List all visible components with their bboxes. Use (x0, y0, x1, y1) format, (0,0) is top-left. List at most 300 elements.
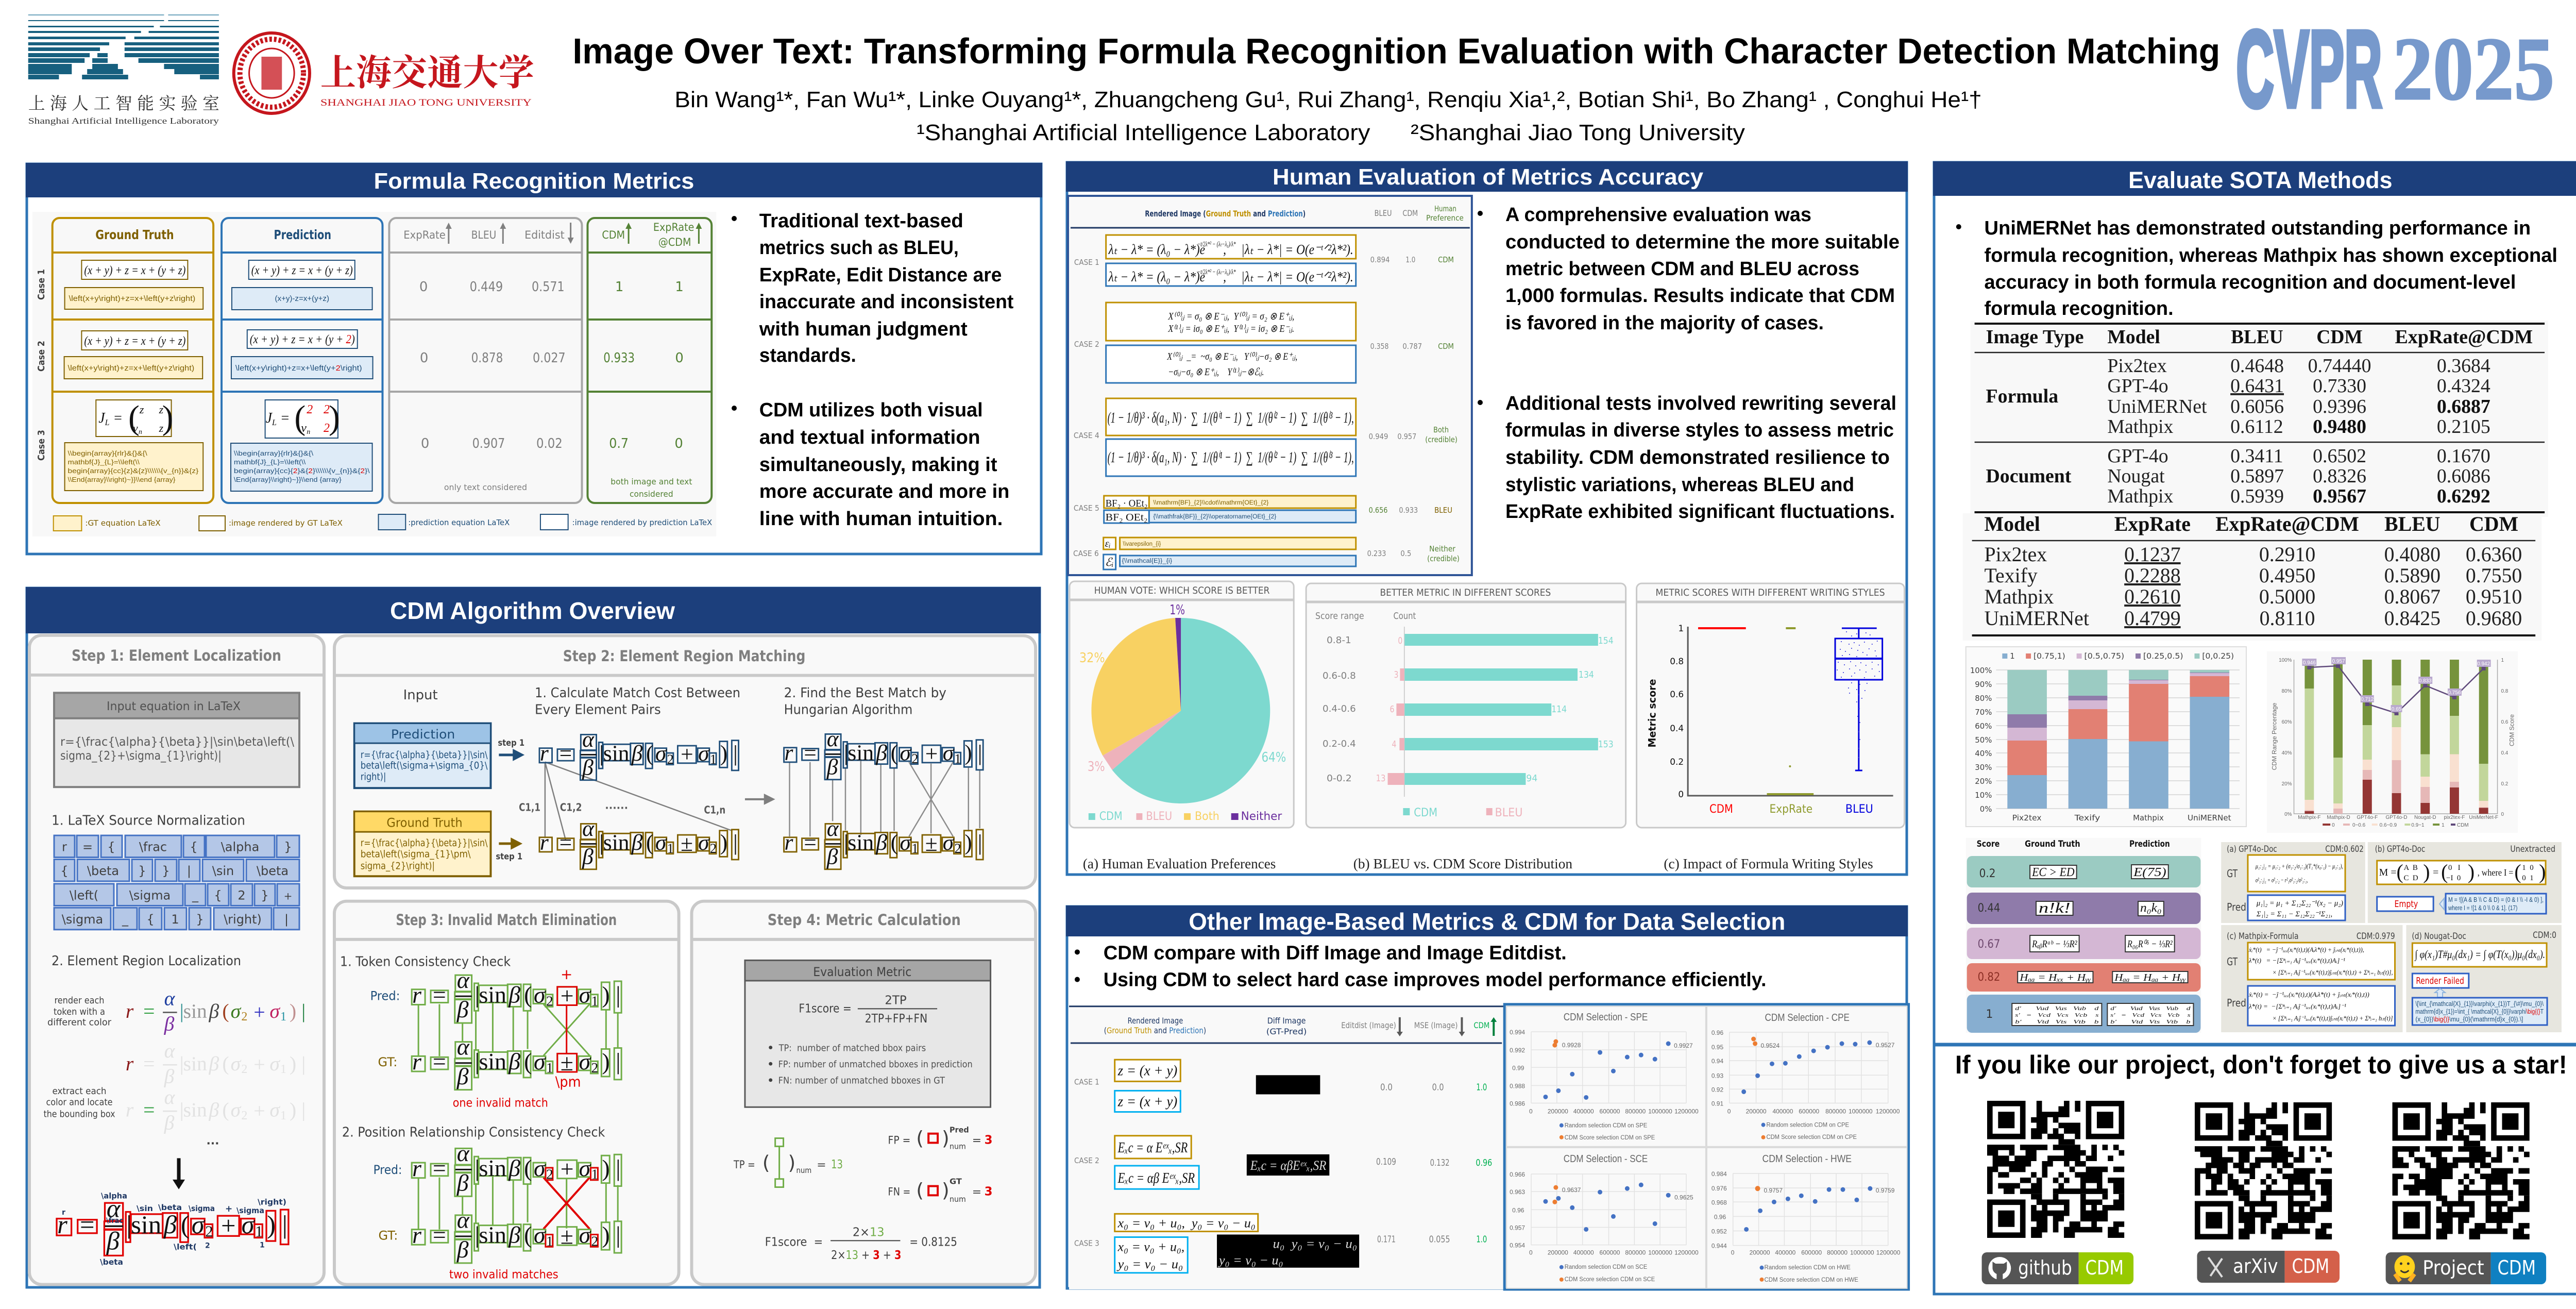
panel: Formula Recognition Metrics (26, 163, 1042, 554)
case formulas: λₜ − λ* = (λ₀ − λ*)e , |λₜ − λ*| = O(e⁻ᵗᐟ²λ*²). (1108, 269, 1353, 284)
panel content (1955, 1050, 2567, 1284)
faded formula 1: ) (290, 1052, 296, 1075)
case 2 row: Eₓc = αβEᵉˣₓ,SR (1250, 1158, 1326, 1173)
score examples table: 0.67 (1978, 938, 2000, 951)
faded formula 2: ) (290, 1099, 296, 1121)
chart: pie human vote: Both (1195, 810, 1219, 823)
position check gt formula: ± (561, 1222, 573, 1249)
case 2 row: CASE 2 (1074, 1156, 1099, 1165)
table: image type results: 0.9567 (2313, 485, 2366, 507)
case labels (36, 269, 47, 461)
metric values: both image and text (611, 477, 692, 486)
formula cells: (x + y) + z = x + (y + z) (84, 334, 185, 348)
ground truth formula boxes: r (540, 830, 549, 855)
example (c) Mathpix-Formula: ẋᵢ*(t) = −ĵ⁻¹ᵢₑₓ(xᵢ*(t),t)(Aᵢλ̇*(t) + ĵᵢₙₜ(xᵢ*(t),t)), (2248, 946, 2364, 953)
table: image type results: 0.6887 (2437, 396, 2490, 417)
metric values: 0 (421, 436, 429, 451)
faded formula 2: α (164, 1086, 176, 1109)
ground truth input (354, 812, 490, 876)
chart: CDM Selection SCE: 800000 (1625, 1249, 1646, 1256)
score examples table: d′ Vud Vus Vub d (2110, 1005, 2191, 1012)
prediction formula boxes: r (540, 741, 549, 766)
input equation box: sigma_{2}+\sigma_{1}\right)| (60, 749, 222, 763)
step 3: Invalid Match Elimination: Step 3: Invalid Match Elimination (396, 911, 617, 929)
table: image type results: 0.6292 (2437, 485, 2490, 507)
panel content (32, 169, 1014, 536)
chart: better metric bars: 134 (1579, 669, 1594, 680)
chart: stacked score ranges: 50% (1975, 735, 1992, 745)
LaTeX normalization tokens: \beta (257, 864, 289, 878)
element region localization: color and locate (46, 1097, 112, 1108)
formula with red boxes and labels: ( (181, 1210, 190, 1239)
example (a) GPT4o-Doc: Σ₁|₂ = Σ₁₁ − Σ₁₂Σ₂₂⁻¹Σ₂₁, (2256, 910, 2332, 918)
chart: stacked score ranges: 0% (1980, 804, 1992, 814)
formula cells: \\begin{array}{rlr}&{}&{\ (68, 449, 147, 457)
best match prediction formula: σ (943, 741, 955, 765)
table: model results: UniMERNet (1985, 607, 2089, 630)
table: model results: 0.2610 (2124, 585, 2181, 608)
score examples table: 0.2 (1979, 867, 1995, 880)
chart: box plot metric scores: 0.4 (1670, 723, 1684, 733)
LaTeX normalization tokens: { (190, 840, 198, 854)
step 1: Element Localization: Step 1: Element Localization (72, 647, 281, 665)
prediction formula boxes: ) (720, 741, 727, 766)
TP / FP / FN formulas: = (972, 1134, 981, 1147)
LaTeX normalization tokens: \beta (87, 864, 119, 878)
token check gt formula: | (475, 1048, 480, 1075)
chart: box plot metric scores (1637, 583, 1904, 828)
formula with red boxes and labels: σ (192, 1210, 206, 1239)
position check gt formula: α (457, 1207, 470, 1233)
chart: CDM Selection SPE: 0 (1529, 1108, 1533, 1115)
TP / FP / FN formulas: FN = (888, 1185, 910, 1198)
formula cells: L (105, 418, 110, 427)
table: image type results: 0.8326 (2313, 465, 2366, 487)
chart: stacked score ranges: [0.5,0.75) (2084, 651, 2124, 661)
token check pred formula: | (475, 982, 480, 1008)
chart: CDM Selection CPE: 200000 (1746, 1108, 1767, 1115)
formula cells: J (266, 410, 272, 426)
chart: CDM range percentage: CDM (2457, 823, 2469, 828)
arrow: down (173, 1158, 185, 1189)
chart: CDM Selection SCE: 0 (1529, 1249, 1533, 1256)
faded formula 1: ( (222, 1052, 229, 1075)
chart: CDM Selection CPE: 0.94 (1711, 1058, 1723, 1065)
chart: CDM Selection SCE (1510, 1153, 1699, 1283)
case labels and values: Both (1433, 425, 1449, 434)
formula with red boxes and labels: \beta (158, 1203, 182, 1212)
step 2: Element Region Matching: Hungarian Algorithm (784, 702, 912, 718)
colored formula: σ (231, 1000, 242, 1022)
case 3 row: x₀ = v₀ + u₀, y₀ = v₀ − u₀ (1117, 1216, 1256, 1230)
case formulas: X⁽⁰⁾ᵢⱼ _= ~σ₀ ⊗ E⁻ᵢⱼ, Y⁽⁰⁾ᵢⱼ−σ₂ ⊗ E⁺ᵢⱼ, (1166, 351, 1297, 362)
chart: box plot metric scores: BLEU (1845, 803, 1873, 816)
token check gt formula: 1 (546, 1060, 553, 1076)
evaluation metric box (745, 960, 991, 1107)
table: image type results: Mathpix (2107, 485, 2173, 507)
chart: CDM Selection SCE: 0.963 (1510, 1188, 1525, 1196)
position check gt formula: 1 (546, 1233, 553, 1249)
case formulas (1105, 241, 1354, 568)
chart: CDM Selection SPE: 0.9927 (1674, 1042, 1693, 1049)
panel: CDM Algorithm Overview (26, 587, 1041, 1287)
best match ground truth formula: 2 (954, 841, 961, 856)
column headers: ExpRate (403, 229, 446, 241)
best match prediction formula (784, 727, 983, 780)
chart: CDM Selection HWE: 0.96 (1714, 1213, 1726, 1220)
CVPR 2025 logo: CVPR (2236, 8, 2382, 130)
column headers: Prediction (274, 227, 331, 242)
case formula boxes (1104, 235, 1356, 569)
faded formula 2: = (142, 1099, 156, 1121)
case formulas: \\varepsilon_{i} (1123, 540, 1161, 547)
case 1 row (1074, 1060, 1487, 1112)
bullets: traditional metrics and CDM (732, 210, 1014, 530)
ground truth formula boxes: | (599, 830, 604, 855)
chart: stacked score ranges (1966, 647, 2246, 827)
best match ground truth formula: β (826, 845, 838, 869)
case labels and values: 0.656 (1369, 506, 1387, 515)
chart: stacked score ranges: [0,0.25) (2202, 651, 2234, 661)
header: SJTU logo: 上海交通大学 (320, 44, 534, 95)
faded formula 1 (126, 1039, 306, 1087)
case labels and values (1073, 255, 1460, 563)
element region localization: render each (54, 995, 104, 1006)
case 1 row: CASE 1 (1074, 1077, 1099, 1086)
chart: CDM range percentage: Mathpix-D (2327, 815, 2350, 820)
LaTeX normalization tokens: { (107, 840, 115, 854)
bullet: SOTA summary (1956, 217, 2557, 320)
chart: box plot metric scores: ExpRate (1770, 803, 1812, 816)
case labels and values: CASE 6 (1073, 549, 1099, 558)
faded formula 2: 2 (241, 1109, 247, 1122)
faded formula 1: α (164, 1039, 176, 1062)
faded formula 1: | (301, 1052, 306, 1075)
formula cells: begin{array}{cc}{z}&{z}\\\\\\{v_{n}}&{z} (68, 467, 199, 475)
example (b) GPT4o-Doc unextracted: where I = ![1 & 0 \\ 0 & 1]. (17) (2448, 904, 2517, 912)
LaTeX normalization tokens: | (187, 864, 191, 878)
LaTeX normalization tokens: } (162, 864, 170, 878)
column headers (95, 221, 702, 248)
chart: CDM Selection SPE: 0.988 (1510, 1082, 1525, 1089)
formula with red boxes and labels: \sigma (236, 1206, 264, 1215)
example (d) Nougat-Doc: CDM:0 (2533, 930, 2556, 940)
prediction input (354, 724, 490, 788)
chart: CDM range percentage: CDM Score (2508, 714, 2515, 746)
best match ground truth formula: ) (964, 830, 972, 855)
heading: Human Evaluation: Human Evaluation of Metrics Accuracy (1273, 164, 1704, 190)
example (b) GPT4o-Doc unextracted: ) (2468, 860, 2475, 883)
chart: better metric bars: BLEU (1495, 807, 1522, 819)
content wrapper (1069, 908, 1909, 1289)
chart: better metric bars: Count (1393, 611, 1416, 622)
bullets: human evaluation (1478, 204, 1900, 523)
colored formula: σ (269, 1000, 280, 1022)
position check pred formula: + (561, 1156, 574, 1182)
table: model results: 0.2910 (2259, 543, 2315, 566)
faded formula 2: | (180, 1099, 184, 1121)
token check gt formula: σ (534, 1048, 546, 1075)
chart: CDM range percentage: 0% (2284, 812, 2292, 817)
chart: CDM Selection CPE: 0.9527 (1876, 1042, 1895, 1049)
score examples table: 1 (1986, 1008, 1993, 1021)
step 2: Element Region Matching: Input (403, 687, 438, 703)
LaTeX normalization tokens: = (82, 840, 93, 854)
position check gt formula: r (412, 1221, 421, 1248)
case formulas: {\\mathcal{E}}_{i} (1122, 557, 1172, 564)
table: image type results: Formula (1986, 385, 2058, 407)
metric values: 0.907 (472, 436, 505, 451)
faded formula 2: r (126, 1099, 134, 1121)
best match lines (790, 761, 980, 836)
chart: CDM Selection CPE: 0.92 (1711, 1086, 1723, 1093)
ground truth formula boxes: 1 (667, 841, 674, 856)
bullets: data selection: CDM compare with Diff Image and Image Editdist. (1104, 942, 1567, 964)
best match prediction formula: | (978, 741, 982, 765)
formula cells: ) (329, 399, 340, 437)
icon: hugging face (2395, 1255, 2415, 1281)
best match prediction formula: 2 (911, 751, 918, 766)
chart: box plot metric scores: Metric score (1646, 679, 1658, 747)
example (a) GPT4o-Doc: μ₁|₂ = μ₁ + Σ₁₂Σ₂₂⁻¹(x₂ − μ₂) (2256, 899, 2343, 908)
TP / FP / FN formulas: = (972, 1185, 981, 1198)
badge: github CDM: CDM (2086, 1256, 2124, 1279)
comparison table: Rendered Image (1128, 1016, 1183, 1026)
chart: box plot metric scores: 0.6 (1670, 689, 1684, 699)
formula with red boxes and labels: 2 (205, 1241, 210, 1250)
token check pred formula: β (456, 996, 469, 1022)
best match ground truth formula: ( (891, 830, 898, 855)
TP / FP / FN formulas: num (796, 1166, 811, 1175)
metric values: 0 (674, 436, 683, 451)
step 2: Element Region Matching: Every Element Pairs (535, 702, 661, 718)
formula cells: ( (294, 399, 306, 437)
formula cells: ( (128, 399, 140, 437)
bullets: traditional metrics and CDM: metrics such as BLEU, (759, 237, 959, 259)
comparison table: MSE (Image) (1414, 1020, 1458, 1030)
chart: CDM range percentage: 0 (2332, 823, 2335, 828)
colored formula: r (126, 1000, 134, 1022)
bullet: SOTA summary: UniMERNet has demonstrated outstanding performance in (1985, 217, 2531, 239)
ground truth formula boxes: = (558, 830, 573, 855)
chart: CDM range percentage: 0.65 (2392, 707, 2402, 712)
chart: CDM range percentage: 0.833 (2419, 678, 2432, 684)
score examples table: Score (1977, 838, 1999, 849)
panel: Other Image-Based Metrics and CDM for Data Selection (1066, 905, 1909, 1289)
ground truth formula boxes: α (582, 816, 595, 841)
score examples table: d′ Vud Vus Vub d (2015, 1005, 2099, 1012)
case labels and values: 0.949 (1369, 432, 1388, 441)
table: image type results: 0.1670 (2437, 445, 2490, 467)
chart: box plot metric scores: 0.8 (1670, 656, 1684, 666)
table: model results: 0.8425 (2384, 607, 2441, 630)
case 3 row: u₀ y₀ = v₀ − u₀ (1273, 1237, 1357, 1251)
chart: CDM Selection HWE: 0 (1731, 1249, 1735, 1256)
chart: CDM Selection SPE: 0.992 (1510, 1047, 1525, 1054)
step 2: Element Region Matching (334, 635, 1036, 888)
score examples table: b′ Vtd Vts Vtb b (2015, 1019, 2099, 1025)
chart: CDM Selection SPE: 0.986 (1510, 1100, 1525, 1107)
column headers: Editdist (524, 229, 565, 241)
TP / FP / FN formulas: ) (942, 1127, 950, 1149)
token check pred formula: 1 (591, 994, 598, 1009)
header: SJTU logo: SHANGHAI JIAO TONG UNIVERSITY (320, 97, 532, 108)
chart: CDM Selection CPE: 0 (1727, 1108, 1731, 1115)
scatter charts frame (1504, 1004, 1909, 1289)
LaTeX normalization tokens: } (284, 840, 292, 854)
heading: CDM Algorithm Overview: CDM Algorithm Overview (390, 597, 675, 624)
faded formula 1: 2 (241, 1063, 247, 1076)
formula cells: mathbf{J}_{L}=\\left(\\ (68, 458, 140, 466)
badge: github CDM: github (2018, 1256, 2072, 1279)
token check pred formula: σ (534, 982, 546, 1008)
case formulas: X⁽¹⁾ᵢⱼ = iσ₀ ⊗ E⁺ᵢⱼ, Y⁽¹⁾ᵢⱼ = iσ₂ ⊗ E⁻ᵢⱼ. (1167, 323, 1294, 334)
badge: arXiv CDM: CDM (2292, 1255, 2329, 1278)
metric values: 0 (420, 350, 428, 366)
chart: stacked score ranges: Texify (2074, 813, 2100, 823)
LaTeX normalization tokens: \left( (70, 888, 98, 902)
chart: CDM range percentage: 80% (2282, 689, 2292, 694)
chart: pie human vote: Neither (1241, 810, 1282, 823)
case labels: Case 3 (36, 430, 47, 461)
chart: stacked score ranges: 40% (1975, 749, 1992, 758)
best match prediction formula: α (827, 727, 839, 751)
case labels and values: (credible) (1425, 435, 1458, 444)
formula with red boxes and labels: + (225, 1203, 232, 1214)
formula with red boxes and labels: σ (242, 1210, 256, 1239)
token check gt formula: | (616, 1048, 620, 1075)
example (a) GPT4o-Doc (2221, 842, 2365, 923)
chart: CDM Selection HWE: CDM Score selection CDM on HWE (1765, 1276, 1858, 1283)
metric values: 0.933 (603, 350, 635, 366)
example (a) GPT4o-Doc: σ²₁:₂|₁ = σ²₁:₂ − r²₁σ²₁:₂/σ²₁:₁, (2256, 876, 2308, 884)
step 3: Invalid Match Elimination: GT: (379, 1228, 398, 1243)
bullets: traditional metrics and CDM: CDM utilizes both visual (759, 399, 983, 421)
invalid match notes (453, 966, 581, 1110)
bullets: human evaluation: stability. CDM demonstrated resilience to (1505, 447, 1890, 468)
table: model results: 0.8067 (2384, 585, 2441, 608)
chart: box plot metric scores: 1 (1678, 623, 1684, 633)
example (b) GPT4o-Doc unextracted: ( (2441, 860, 2448, 883)
table: model results: BLEU (2384, 512, 2441, 535)
example (c) Mathpix-Formula: CDM:0.979 (2357, 931, 2395, 941)
metric values: only text considered (444, 482, 527, 492)
position check gt formula: β (456, 1236, 469, 1263)
badge: arXiv CDM (2197, 1251, 2340, 1283)
cost labels: C1,2 (560, 801, 582, 814)
prediction formula boxes: | (599, 741, 604, 766)
position check pred formula: ) (602, 1155, 610, 1181)
TP / FP / FN formulas: FP = (888, 1134, 910, 1147)
prediction formula boxes: | (733, 741, 738, 766)
faded formula 2: + (253, 1100, 265, 1122)
ground truth input: beta\left(\sigma_{1}\pm\ (361, 849, 471, 860)
table: model results: 0.5890 (2384, 564, 2441, 587)
position check pred formula: 2 (546, 1167, 553, 1183)
QR code: project (2393, 1102, 2530, 1239)
chart: CDM range percentage: 0 (2501, 812, 2504, 817)
column headers: BLEU (471, 229, 496, 241)
example (b) GPT4o-Doc unextracted: ) (2539, 860, 2546, 883)
position check pred formula: β (456, 1170, 469, 1196)
metric values: 0.02 (536, 436, 563, 451)
best match ground truth formula: = (802, 830, 818, 855)
position check pred formula: = (431, 1155, 447, 1181)
chart: CDM Selection SPE: 800000 (1625, 1108, 1646, 1115)
chart: CDM Selection HWE: 200000 (1750, 1249, 1770, 1256)
colored formula: β (209, 1000, 219, 1022)
example (d) Nougat-Doc: (d) Nougat-Doc (2412, 931, 2466, 941)
step 1 arrows: step 1 (498, 737, 524, 748)
table: image type results: GPT-4o (2107, 445, 2168, 467)
score examples table: RₐᵦRᵃᵇ − ⅓R² (2031, 938, 2077, 950)
evaluation metric box: FN: number of unmatched bboxes in GT (778, 1076, 945, 1086)
prediction formula boxes: + (681, 742, 693, 767)
chart: CDM Selection SCE: 1200000 (1674, 1249, 1699, 1256)
table: model results: ExpRate (2114, 512, 2191, 535)
LaTeX normalization tokens: | (284, 912, 289, 927)
score examples table: s′ = Vcd Vcs Vcb s (2015, 1012, 2098, 1018)
example (c) Mathpix-Formula: × [Σⁿᵢ₌₁ Aᵢĵ⁻¹ᵢₑₓ(xᵢ*(t),t)ĵᵢₙₜ(xᵢ*(t),t) + Σⁿᵢ₌₁ bᵢₜ(t)] (2273, 1014, 2393, 1022)
token check gt formula: r (412, 1048, 421, 1075)
chart: CDM Selection SCE: 0.9637 (1562, 1186, 1581, 1194)
formula with red boxes and labels: 1 (260, 1241, 265, 1249)
faded formula 1: | (180, 1052, 184, 1075)
formula cells: L (272, 418, 277, 427)
chart: CDM Selection SPE: CDM Score selection CDM on SPE (1565, 1134, 1655, 1141)
formula with red boxes and labels: β (106, 1227, 120, 1255)
chart: CDM Selection SCE: 200000 (1548, 1249, 1568, 1256)
table: model results: CDM (2469, 512, 2518, 535)
prediction input: Prediction (391, 727, 455, 742)
best match ground truth formula: | (844, 830, 849, 855)
evaluation metric box: TP: number of matched bbox pairs (778, 1043, 926, 1053)
header: SJTU logo (234, 33, 534, 113)
chart: CDM Selection HWE: Random selection CDM on HWE (1765, 1264, 1851, 1271)
faded formula 1: + (253, 1053, 265, 1076)
column headers: Ground Truth (95, 227, 174, 242)
position check pred formula: σ (534, 1155, 546, 1181)
case labels and values: 0.787 (1402, 342, 1422, 351)
chart: CDM range percentage: GPT4o-F (2357, 815, 2378, 820)
best match ground truth formula: r (785, 830, 793, 855)
prediction formula boxes: = (558, 741, 573, 766)
chart: box plot metric scores: METRIC SCORES WITH DIFFERENT WRITING STYLES (1655, 587, 1885, 598)
table: image type results (1971, 321, 2548, 517)
table: model results: 0.7550 (2466, 564, 2522, 587)
position check gt formula: ) (602, 1221, 610, 1248)
table: model results: 0.1237 (2124, 543, 2181, 566)
case formulas: λₜ − λ* = (λ₀ − λ*)e , |λₜ − λ*| = O(e⁻ᵗᐟ²λ*²). (1108, 242, 1353, 257)
token check gt formula: β (508, 1048, 520, 1075)
ground truth formula boxes: ± (681, 831, 693, 856)
chart: better metric bars: 0.2-0.4 (1323, 739, 1356, 749)
case labels and values: 1.0 (1405, 255, 1415, 264)
case labels: Case 1 (36, 269, 47, 300)
chart: better metric bars: Score range (1315, 611, 1364, 622)
LaTeX normalization tokens: } (261, 888, 269, 902)
LaTeX normalization tokens: { (214, 888, 222, 902)
chart: CDM range percentage: UniMerNet-F (2469, 815, 2498, 820)
formula cells: 2 (307, 403, 313, 416)
chart: pie human vote: 3% (1088, 759, 1105, 775)
example (a) GPT4o-Doc: μ₁:₂|₁ = μ₁:₂ + (σ₁:₂/σ₁:₁)(T₁*(x₀:₁) − μ₁:₁), (2255, 862, 2343, 870)
chart: CDM Selection CPE: 0.91 (1711, 1100, 1723, 1107)
chart: CDM Selection SCE: 0.966 (1510, 1171, 1525, 1178)
prediction input: beta\left(\sigma+\sigma_{0}\ (361, 761, 488, 771)
chart: better metric bars: 0.4-0.6 (1323, 703, 1356, 714)
step 3: Invalid Match Elimination: 1. Token Consistency Check (340, 954, 511, 969)
